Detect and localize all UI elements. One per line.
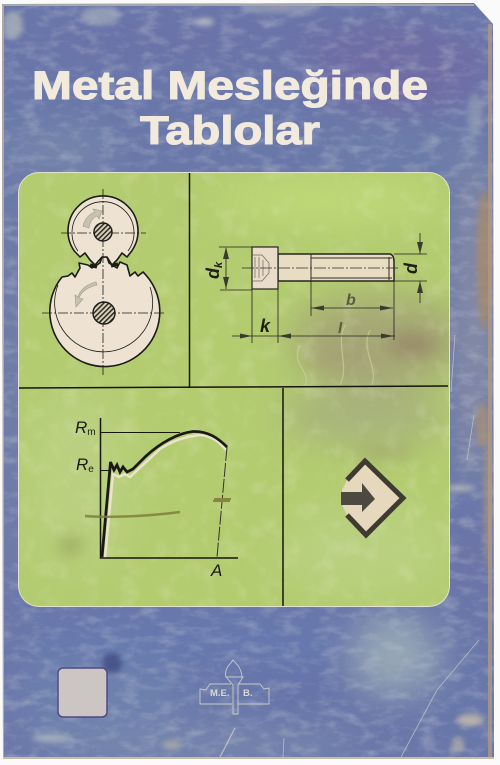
dimension labels: k: [260, 316, 271, 336]
guide lines: [101, 432, 180, 470]
dimension lines: [219, 233, 427, 343]
curve labels: m: [87, 427, 96, 438]
socket: [252, 255, 269, 281]
diagram: socket head screw: [203, 233, 427, 343]
gear teeth dark mesh: [90, 264, 118, 267]
cover square badge: [58, 668, 107, 717]
dimension arrowheads: [223, 242, 423, 338]
panel dividers: [19, 173, 448, 606]
dimension labels: d: [203, 268, 223, 279]
curve labels: R: [75, 418, 87, 437]
curve: [102, 431, 227, 557]
lower gear: [50, 257, 160, 367]
pitch circles: [55, 202, 153, 352]
title: [32, 64, 428, 153]
diagram: meshing gears: [42, 189, 165, 376]
dimension labels: k: [213, 261, 225, 268]
title line 1: Metal Mesleğinde: [32, 64, 428, 108]
fracture dashed line: [217, 447, 227, 557]
upper gear: [68, 196, 138, 265]
open book: [200, 684, 269, 704]
curve highlight: [105, 435, 226, 558]
shafts: [93, 223, 115, 324]
green panel: [18, 172, 470, 607]
book letters: M.E.: [210, 688, 230, 699]
torch: [226, 660, 243, 714]
icon: arrow in diamond: [341, 461, 403, 535]
dimension labels: d: [401, 262, 421, 274]
dimension labels: [203, 261, 421, 337]
edge wear: [488, 24, 492, 759]
dimension labels: b: [346, 292, 356, 309]
cover creases: [220, 335, 479, 757]
screw body: [278, 254, 394, 281]
screw head: [252, 247, 278, 289]
curve labels: R: [76, 455, 88, 474]
thread lines: [311, 254, 392, 281]
diagram: stress-strain curve: [75, 418, 238, 580]
axis: [242, 267, 400, 269]
curve labels: e: [88, 464, 94, 475]
curve labels: [75, 418, 222, 580]
rotation arrows: [75, 209, 102, 307]
title line 2: Tablolar: [140, 109, 320, 153]
centre lines: [42, 189, 165, 376]
curve labels: A: [210, 561, 222, 580]
smudge: [85, 512, 180, 517]
publisher logo: B.: [243, 688, 252, 699]
publisher logo: [200, 660, 269, 714]
dimension labels: l: [338, 320, 343, 337]
axes: [100, 418, 238, 558]
